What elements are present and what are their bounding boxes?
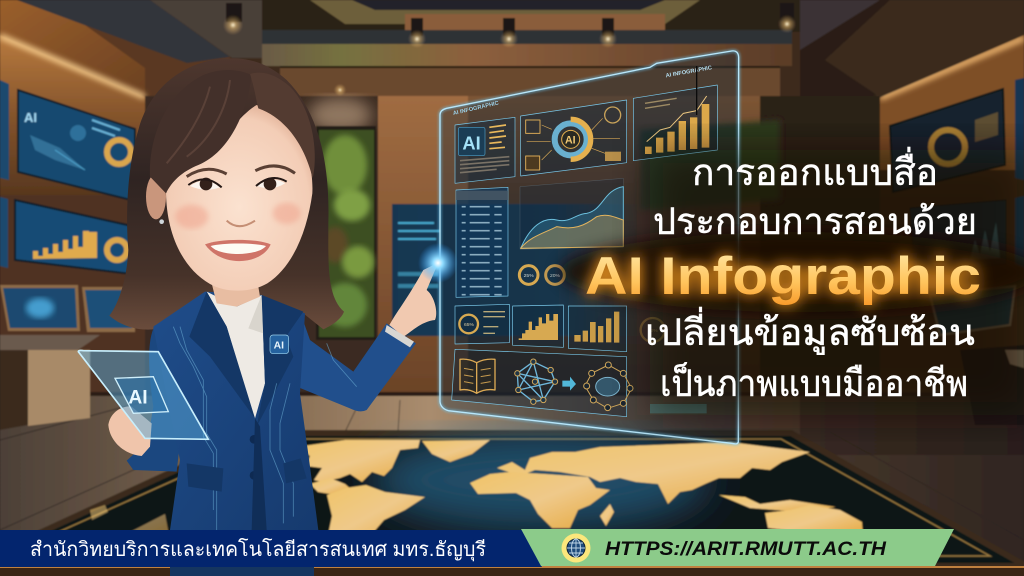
- navy organisation bar: สำนักวิทยบริการและเทคโนโลยีสารสนเทศ มทร.ธัญบุรี: [30, 538, 486, 562]
- tablet hologram: AI: [128, 387, 148, 408]
- continents: [90, 440, 863, 540]
- AI gauge card: AI: [565, 134, 576, 146]
- data table: [456, 187, 508, 297]
- ceiling spotlights: [223, 3, 796, 96]
- percent rings: [519, 266, 564, 284]
- lower mini chart cards: 65%: [464, 322, 475, 328]
- percent rings: 20%: [550, 273, 561, 279]
- AI badge: [270, 335, 289, 354]
- lapels: [189, 292, 303, 427]
- back wall: [145, 96, 880, 396]
- icon: globe: [562, 534, 590, 562]
- left wall: [0, 0, 230, 400]
- green wall: [316, 126, 376, 340]
- presenter character: [78, 58, 438, 530]
- percent rings: 25%: [524, 273, 534, 279]
- nose: [227, 221, 255, 226]
- holographic infographic panel: AI INFOGRAPHIC: [665, 65, 712, 79]
- headline line 4: เปลี่ยนข้อมูลซับซ้อน: [645, 306, 975, 355]
- left arm sleeve: [127, 325, 187, 472]
- left kiosks: [0, 285, 135, 430]
- headline: [585, 146, 981, 404]
- floor strip under banner: [0, 566, 1024, 576]
- bangs: [150, 70, 315, 193]
- AI summary card: [455, 117, 515, 183]
- circuit pattern: [173, 327, 357, 530]
- right hand pointing: [385, 263, 438, 347]
- lower mini chart cards: 52%: [648, 328, 658, 334]
- headline line 1: การออกแบบสื่อ: [692, 146, 938, 193]
- floor: [0, 392, 1024, 576]
- AI badge: AI: [274, 340, 284, 351]
- green URL bar: [521, 529, 954, 566]
- fingertip glow: [418, 243, 458, 283]
- headline line 2: ประกอบการสอนด้วย: [653, 201, 977, 242]
- holographic infographic panel: [440, 51, 739, 444]
- lower mini chart cards: [455, 304, 665, 352]
- headline AI Infographic: AI Infographic: [585, 247, 981, 306]
- right wall screens: [890, 78, 1024, 425]
- headline glow: AI Infographic: [585, 247, 981, 306]
- blush: [175, 203, 301, 229]
- network diagram card: [452, 349, 707, 417]
- headline line 5: เป็นภาพแบบมืออาชีพ: [660, 360, 968, 404]
- smile: [205, 240, 271, 261]
- right arm sleeve: [297, 312, 416, 411]
- left wall screens: [0, 80, 135, 274]
- eyes and brows: [187, 166, 295, 190]
- ceiling: [150, 0, 880, 100]
- hair back: [109, 58, 344, 330]
- jacket body: [153, 292, 318, 530]
- dark scrim behind headline: [560, 150, 1024, 415]
- green URL bar: HTTPS://ARIT.RMUTT.AC.TH: [605, 539, 887, 560]
- navy organisation bar: [0, 530, 542, 567]
- tablet hologram: [78, 350, 208, 439]
- top bar chart card: [633, 66, 717, 161]
- right wall: [800, 0, 1024, 400]
- panel header labels: AI INFOGRAPHIC: [452, 101, 499, 117]
- mid screen behind panel: [392, 204, 642, 336]
- buttons and pockets: [187, 418, 307, 530]
- ear: [146, 174, 166, 224]
- left wall screens: AI: [24, 110, 37, 125]
- AI summary card: AI: [462, 132, 481, 153]
- line chart: [520, 178, 623, 249]
- face: [166, 105, 312, 291]
- footer banner: [0, 529, 1024, 576]
- panel glass: [440, 51, 739, 444]
- world map table: [0, 430, 1024, 566]
- shirt: [207, 292, 265, 418]
- neck: [210, 277, 260, 307]
- AI gauge card: [521, 100, 627, 176]
- left hand: [108, 406, 152, 456]
